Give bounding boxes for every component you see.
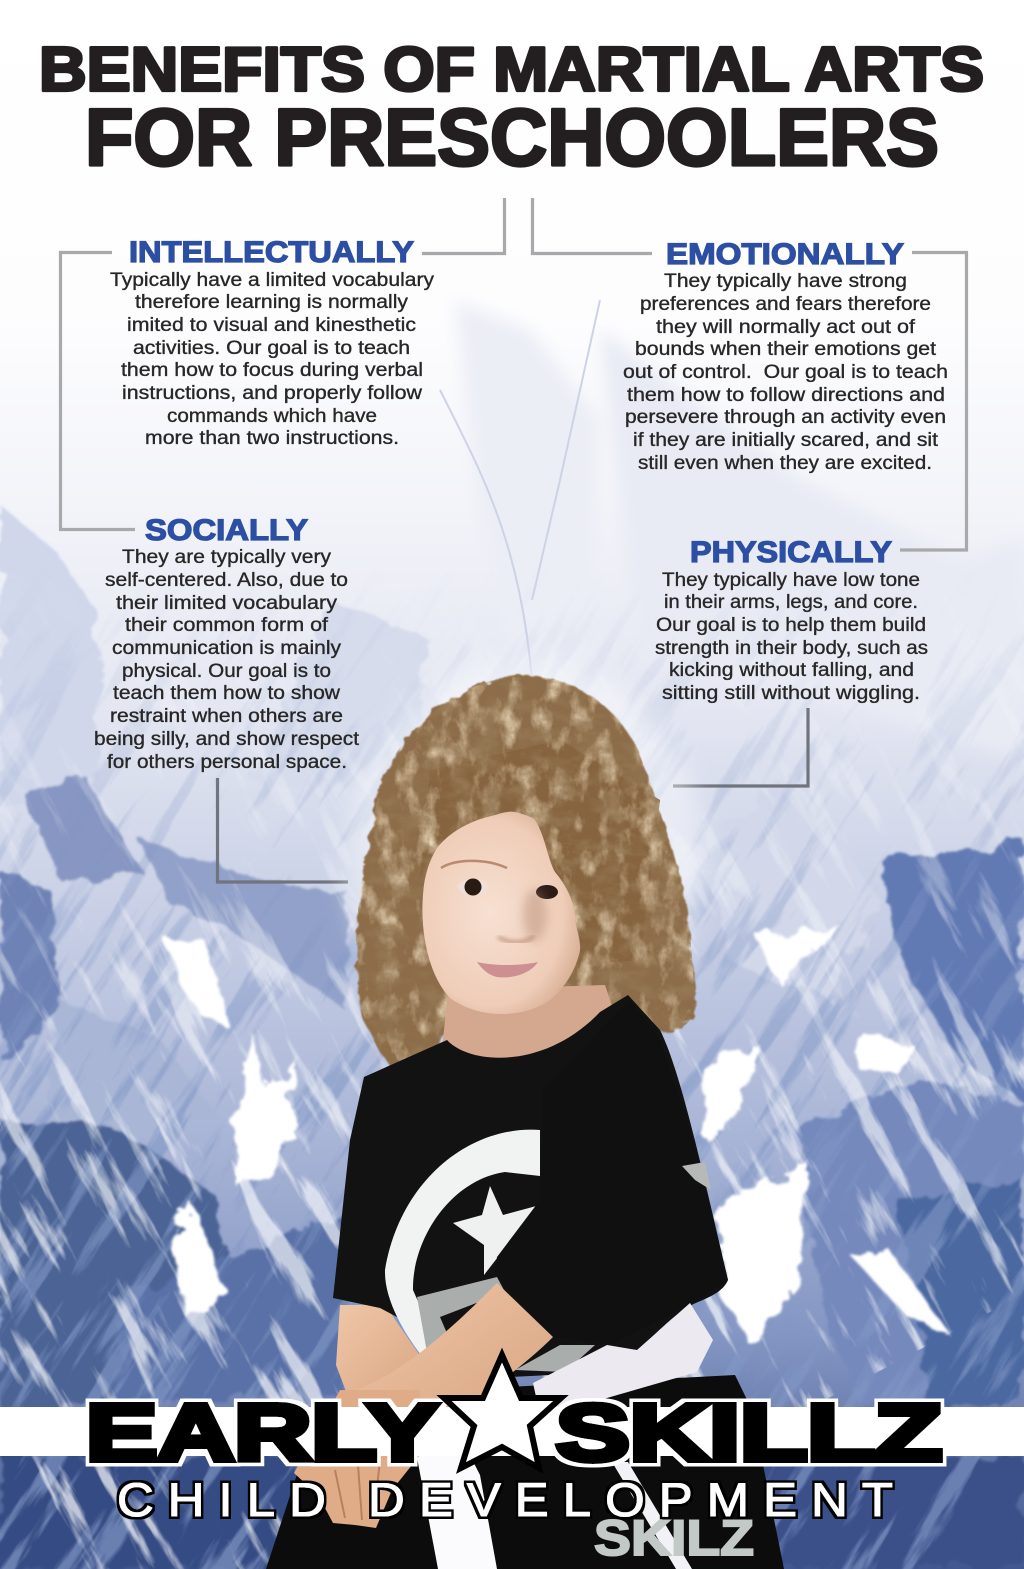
text block: intellectually: commands which have [167,405,377,427]
text block: emotionally: out of control. Our goal is to teach [623,361,948,383]
brow [441,861,507,868]
text block: physically: They typically have low tone [662,569,920,591]
panel: physically [655,536,928,704]
faint crease lines [440,300,600,680]
title: BENEFITS OF MARTIAL ARTS [39,36,984,104]
text block: intellectually: imited to visual and kinesthetic [127,314,416,336]
wordmark right: SKILLZ [556,1388,942,1477]
icon: star [444,1355,561,1468]
text block: physically: Our goal is to help them build [656,614,926,636]
heading: emotionally: EMOTIONALLY [666,238,904,271]
shirt logo ring [385,1130,540,1360]
bracket: physically [673,708,808,786]
shirt star [453,1186,540,1275]
t-shirt [333,995,728,1380]
heading: intellectually: INTELLECTUALLY [129,236,414,269]
text block: emotionally: still even when they are excited. [638,452,932,474]
shorts logo: SKILZ [594,1510,754,1566]
hands [294,1390,420,1528]
bracket: intellectually [60,198,504,530]
left upper arm [336,1305,430,1402]
right forearm [340,1283,553,1430]
text block: intellectually [110,269,434,449]
text block: socially: for others personal space. [107,751,347,773]
neck [440,985,620,1080]
heading: socially: SOCIALLY [145,514,308,547]
text block: intellectually: instructions, and properly follow [122,382,423,404]
mouth [477,962,538,977]
text block: emotionally [623,270,948,474]
pants [266,1375,784,1569]
left eye [458,879,488,895]
text block: emotionally: if they are initially scared, and sit [633,429,939,451]
panel: intellectually [110,236,434,449]
nose shadow [498,936,534,942]
right belt tail [612,1462,692,1569]
text block: physically: sitting still without wiggling. [662,682,920,704]
sleeve print [682,1162,711,1190]
text block: socially: They are typically very [122,546,331,568]
shirt lettering [417,1277,595,1372]
panel: emotionally [623,238,948,474]
text block: intellectually: them how to focus during verbal [121,359,423,381]
logo: Early Skillz Child Development [86,1355,942,1526]
heading: physically: PHYSICALLY [690,536,892,569]
panel: socially [94,514,360,773]
right sleeve [495,1000,728,1345]
wordmark left: EARLY [86,1388,438,1477]
text block: intellectually: more than two instructions. [145,427,399,449]
text block: emotionally: They typically have strong [664,270,907,292]
text block: socially: teach them how to show [113,682,341,704]
logo band [0,1407,1024,1456]
text block: socially: their limited vocabulary [116,592,337,614]
text block: intellectually: Typically have a limited vocabulary [110,269,434,291]
right eye [536,885,558,899]
bracket: emotionally [532,198,966,550]
title [39,36,984,183]
hair glow [345,660,705,1060]
text block: socially: their common form of [125,614,329,636]
text block: socially [94,546,360,773]
text block: intellectually: activities. Our goal is to teach [133,337,410,359]
hair lock over face [420,740,660,965]
face [420,740,660,1014]
text block: emotionally: preferences and fears therefore [640,293,931,315]
text block: intellectually: therefore learning is normally [135,291,408,313]
photo: child in martial arts uniform [266,660,784,1569]
hair [353,673,698,1066]
text block: socially: being silly, and show respect [94,728,360,750]
text block: socially: self-centered. Also, due to [105,569,348,591]
text block: socially: restraint when others are [110,705,343,727]
bracket: socially [218,778,348,882]
tagline: CHILD DEVELOPMENT [117,1473,907,1526]
text block: emotionally: bounds when their emotions get [635,338,937,360]
text block: socially: physical. Our goal is to [122,660,331,682]
text block: emotionally: they will normally act out of [656,316,916,338]
text block: emotionally: them how to follow directions and [627,384,945,406]
karate belt [416,1303,713,1569]
text block: socially: communication is mainly [112,637,341,659]
text block: emotionally: persevere through an activity even [625,406,946,428]
text block: physically: strength in their body, such as [655,637,928,659]
text block: physically [655,569,928,704]
text block: physically: in their arms, legs, and core. [664,591,918,613]
title: FOR PRESCHOOLERS [85,93,939,183]
text block: physically: kicking without falling, and [669,659,914,681]
